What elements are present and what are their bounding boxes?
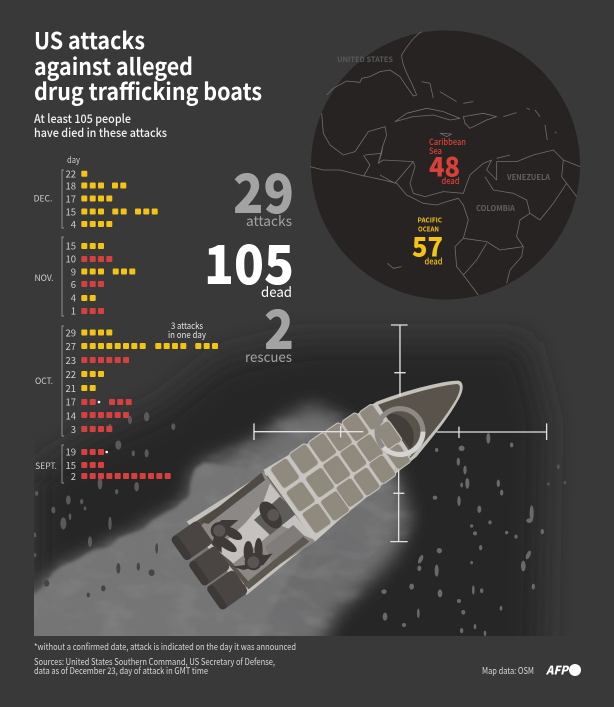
wake: crisp left edge bbox=[34, 462, 287, 604]
day labels: 29 bbox=[65, 326, 76, 340]
day labels: 4 bbox=[71, 217, 76, 231]
pacific label: 57 bbox=[412, 226, 443, 264]
pacific label: OCEAN bbox=[418, 224, 439, 234]
crew bbox=[211, 497, 287, 570]
sources: data as of December 23, day of attack in GMT time bbox=[34, 664, 208, 677]
month labels: DEC. bbox=[34, 192, 52, 204]
October squares bbox=[81, 330, 218, 432]
bow hatch bbox=[377, 409, 423, 455]
day labels: 3 bbox=[71, 422, 76, 436]
stat: rescues: 2 bbox=[264, 286, 294, 365]
month labels: SEPT. bbox=[35, 460, 57, 472]
stat: dead: 105 bbox=[204, 221, 294, 300]
rear seat bbox=[265, 525, 305, 565]
map country labels: COLOMBIA bbox=[476, 203, 516, 214]
day labels: 10 bbox=[65, 252, 76, 266]
stat: dead: dead bbox=[261, 282, 292, 302]
day labels: 14 bbox=[65, 408, 76, 422]
day labels: 19 bbox=[65, 444, 76, 458]
title bbox=[34, 22, 262, 107]
day labels: 23 bbox=[65, 353, 76, 367]
AFP logo: AFP bbox=[545, 662, 570, 678]
title: drug trafficking boats bbox=[34, 73, 262, 107]
September squares bbox=[81, 449, 171, 479]
day labels: 9 bbox=[71, 264, 76, 278]
crosshair bbox=[254, 325, 547, 542]
day labels: 22 bbox=[65, 367, 76, 381]
day labels: 22 bbox=[65, 166, 76, 180]
boat bbox=[170, 381, 463, 611]
day labels: 15 bbox=[65, 204, 76, 218]
chart: attacks by day bbox=[34, 154, 218, 483]
pacific label: dead bbox=[424, 256, 442, 268]
sources bbox=[34, 655, 275, 677]
stern deck bbox=[200, 472, 315, 583]
wake dark specks bbox=[44, 543, 158, 597]
map country labels bbox=[337, 54, 551, 214]
AFP logo bbox=[545, 662, 581, 678]
day labels bbox=[65, 166, 76, 483]
footnote: *without a confirmed date, attack is indicated on the day it was announced bbox=[34, 640, 296, 653]
map country labels: VENEZUELA bbox=[506, 172, 551, 183]
month labels: OCT. bbox=[35, 375, 53, 387]
cargo deck bbox=[263, 403, 412, 542]
annotation: 3 attacks in one day bbox=[168, 319, 206, 341]
caribbean label: Caribbean bbox=[429, 136, 466, 148]
title: US attacks bbox=[34, 22, 145, 56]
console bbox=[254, 497, 297, 535]
stat: rescues: rescues bbox=[245, 347, 292, 367]
title: against alleged bbox=[34, 48, 193, 82]
day labels: 6 bbox=[71, 277, 76, 291]
photo: dark sea with boat wake bbox=[34, 336, 566, 636]
November squares bbox=[81, 243, 135, 314]
day labels: 18 bbox=[65, 178, 76, 192]
day labels: 1 bbox=[71, 304, 76, 318]
day labels: 15 bbox=[65, 238, 76, 252]
subtitle: At least 105 people bbox=[34, 110, 131, 127]
annotation: 3 attacks in one day: in one day bbox=[168, 328, 206, 341]
month labels: NOV. bbox=[34, 272, 54, 284]
pacific label: PACIFIC bbox=[418, 214, 443, 224]
map: circular locator bbox=[310, 30, 580, 300]
day labels: 2 bbox=[71, 469, 76, 483]
cargo packages bbox=[269, 403, 412, 535]
map outlines bbox=[310, 32, 580, 295]
subtitle: have died in these attacks bbox=[34, 124, 167, 141]
month labels bbox=[34, 192, 57, 472]
sea speckles: right of boat bbox=[381, 433, 566, 636]
hull bbox=[187, 381, 463, 595]
month brackets bbox=[62, 170, 64, 483]
stat: rescues bbox=[245, 286, 294, 367]
caribbean label: Sea bbox=[429, 145, 442, 157]
caribbean label: 48 bbox=[429, 146, 460, 184]
day labels: 17 bbox=[65, 394, 76, 408]
annotation: 3 attacks in one day: 3 attacks bbox=[171, 319, 203, 332]
sources: Sources: United States Southern Command, US Secretary of Defense, bbox=[34, 655, 275, 668]
subtitle bbox=[34, 110, 167, 141]
December squares bbox=[81, 171, 158, 227]
stat: attacks: 29 bbox=[233, 150, 294, 229]
stat: attacks: attacks bbox=[246, 211, 292, 231]
map country labels: UNITED STATES bbox=[337, 54, 393, 65]
caribbean label: dead bbox=[442, 175, 460, 187]
day labels: 17 bbox=[65, 192, 76, 206]
caribbean label bbox=[429, 136, 466, 187]
wake: soft body bbox=[20, 405, 410, 650]
outboard motors bbox=[170, 520, 249, 611]
sea speckles: left of boat bbox=[34, 412, 175, 557]
day labels: 21 bbox=[65, 381, 76, 395]
day labels: 27 bbox=[65, 339, 76, 353]
map credit: Map data: OSM bbox=[482, 664, 534, 677]
day labels: 4 bbox=[71, 290, 76, 304]
day header: day bbox=[67, 154, 81, 166]
day labels: 15 bbox=[65, 458, 76, 472]
